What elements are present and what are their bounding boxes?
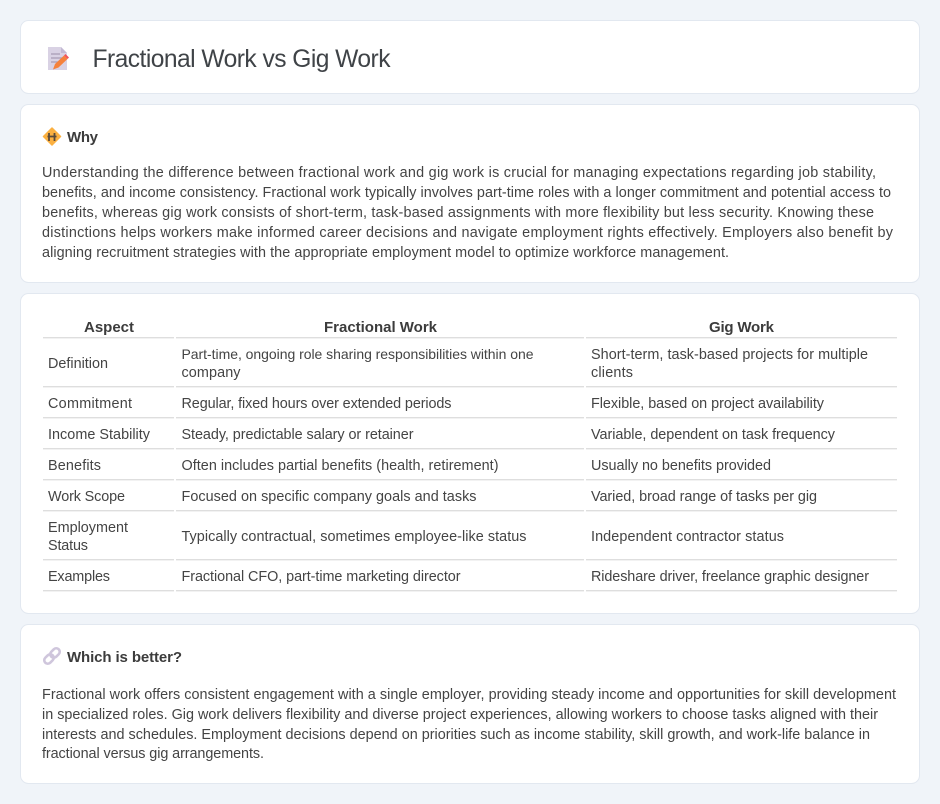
row: benefits: Often includes partial benefits (health, retirement) [182,458,498,474]
row: benefits: Benefits [48,458,101,474]
row: commitment: Flexible, based on project availability [591,396,825,412]
row: commitment [48,396,825,412]
panel: comparison table [20,294,920,614]
row: employment status [48,520,784,554]
row: commitment: Regular, fixed hours over extended periods [182,396,452,412]
table header row: Fractional Work [324,319,438,336]
text block: which is better paragraph: interests and schedules. Employment decisions depend on priorities such as income stability, skill growth, and work-life balance in [42,727,870,743]
row: examples: Fractional CFO, part-time marketing director [182,569,461,585]
row: income stability: Steady, predictable salary or retainer [182,427,414,443]
panel: which is better [20,624,920,784]
title: Fractional Work vs Gig Work [92,46,391,73]
row: income stability: Variable, dependent on task frequency [591,427,836,443]
row: employment status: Employment [48,520,128,536]
row: examples: Rideshare driver, freelance graphic designer [591,569,869,585]
text block: which is better paragraph: in specialized roles. Gig work delivers flexibility and diverse project experiences, allowing workers to choose tasks aligned with their [42,707,878,723]
row: definition: clients [591,365,633,381]
text block: why paragraph [42,165,894,261]
text block: why paragraph: aligning recruitment strategies with the appropriate employment model to optimize workforce management. [42,245,729,261]
row: benefits [48,458,771,474]
row: work scope [48,489,817,505]
text block: why paragraph: distinctions helps workers make informed career decisions and navigate employment rights effectively. Employers also benefit by [42,225,894,241]
text block: why paragraph: Understanding the difference between fractional work and gig work is crucial for managing expectations regarding job stability, [42,165,876,181]
heading: which is better: Which is better? [67,649,182,666]
icon: link [43,647,61,665]
icon: warning diamond [44,128,60,145]
row: income stability: Income Stability [48,427,151,443]
row: employment status: Independent contractor status [591,529,784,545]
row: definition: Definition [48,356,108,372]
text block: which is better paragraph: Fractional work offers consistent engagement with a single employer, providing steady income and opportunities for skill development [42,687,896,703]
row: examples: Examples [48,569,110,585]
table header row [84,319,775,336]
heading: why: Why [67,129,99,146]
row: examples [48,569,869,585]
row: work scope: Focused on specific company goals and tasks [182,489,476,505]
table header row: Aspect [84,319,134,336]
row: definition: company [182,365,241,381]
text block: why paragraph: benefits, whereas gig work consists of short-term, task-based assignments with more flexibility but less security. Knowing these [42,205,874,221]
row: definition [48,346,868,381]
row: employment status: Status [48,538,88,554]
panel: header [20,20,920,94]
row: benefits: Usually no benefits provided [591,458,771,474]
text block: which is better paragraph: fractional versus gig arrangements. [42,746,264,762]
table header row: Gig Work [709,319,775,336]
text block: which is better paragraph [42,687,896,762]
panel: why [20,104,920,282]
row: definition: Short-term, task-based projects for multiple [591,347,868,363]
row: employment status: Typically contractual, sometimes employee-like status [182,529,526,545]
row: work scope: Work Scope [48,489,125,505]
icon: memo and pencil [48,47,69,70]
row: commitment: Commitment [48,396,132,412]
text block: why paragraph: benefits, and income consistency. Fractional work typically involves part-time roles with a longer commitment and potential access to [42,185,891,201]
row: definition: Part-time, ongoing role sharing responsibilities within one [182,346,534,362]
row: work scope: Varied, broad range of tasks per gig [591,489,817,505]
row: income stability [48,427,836,443]
